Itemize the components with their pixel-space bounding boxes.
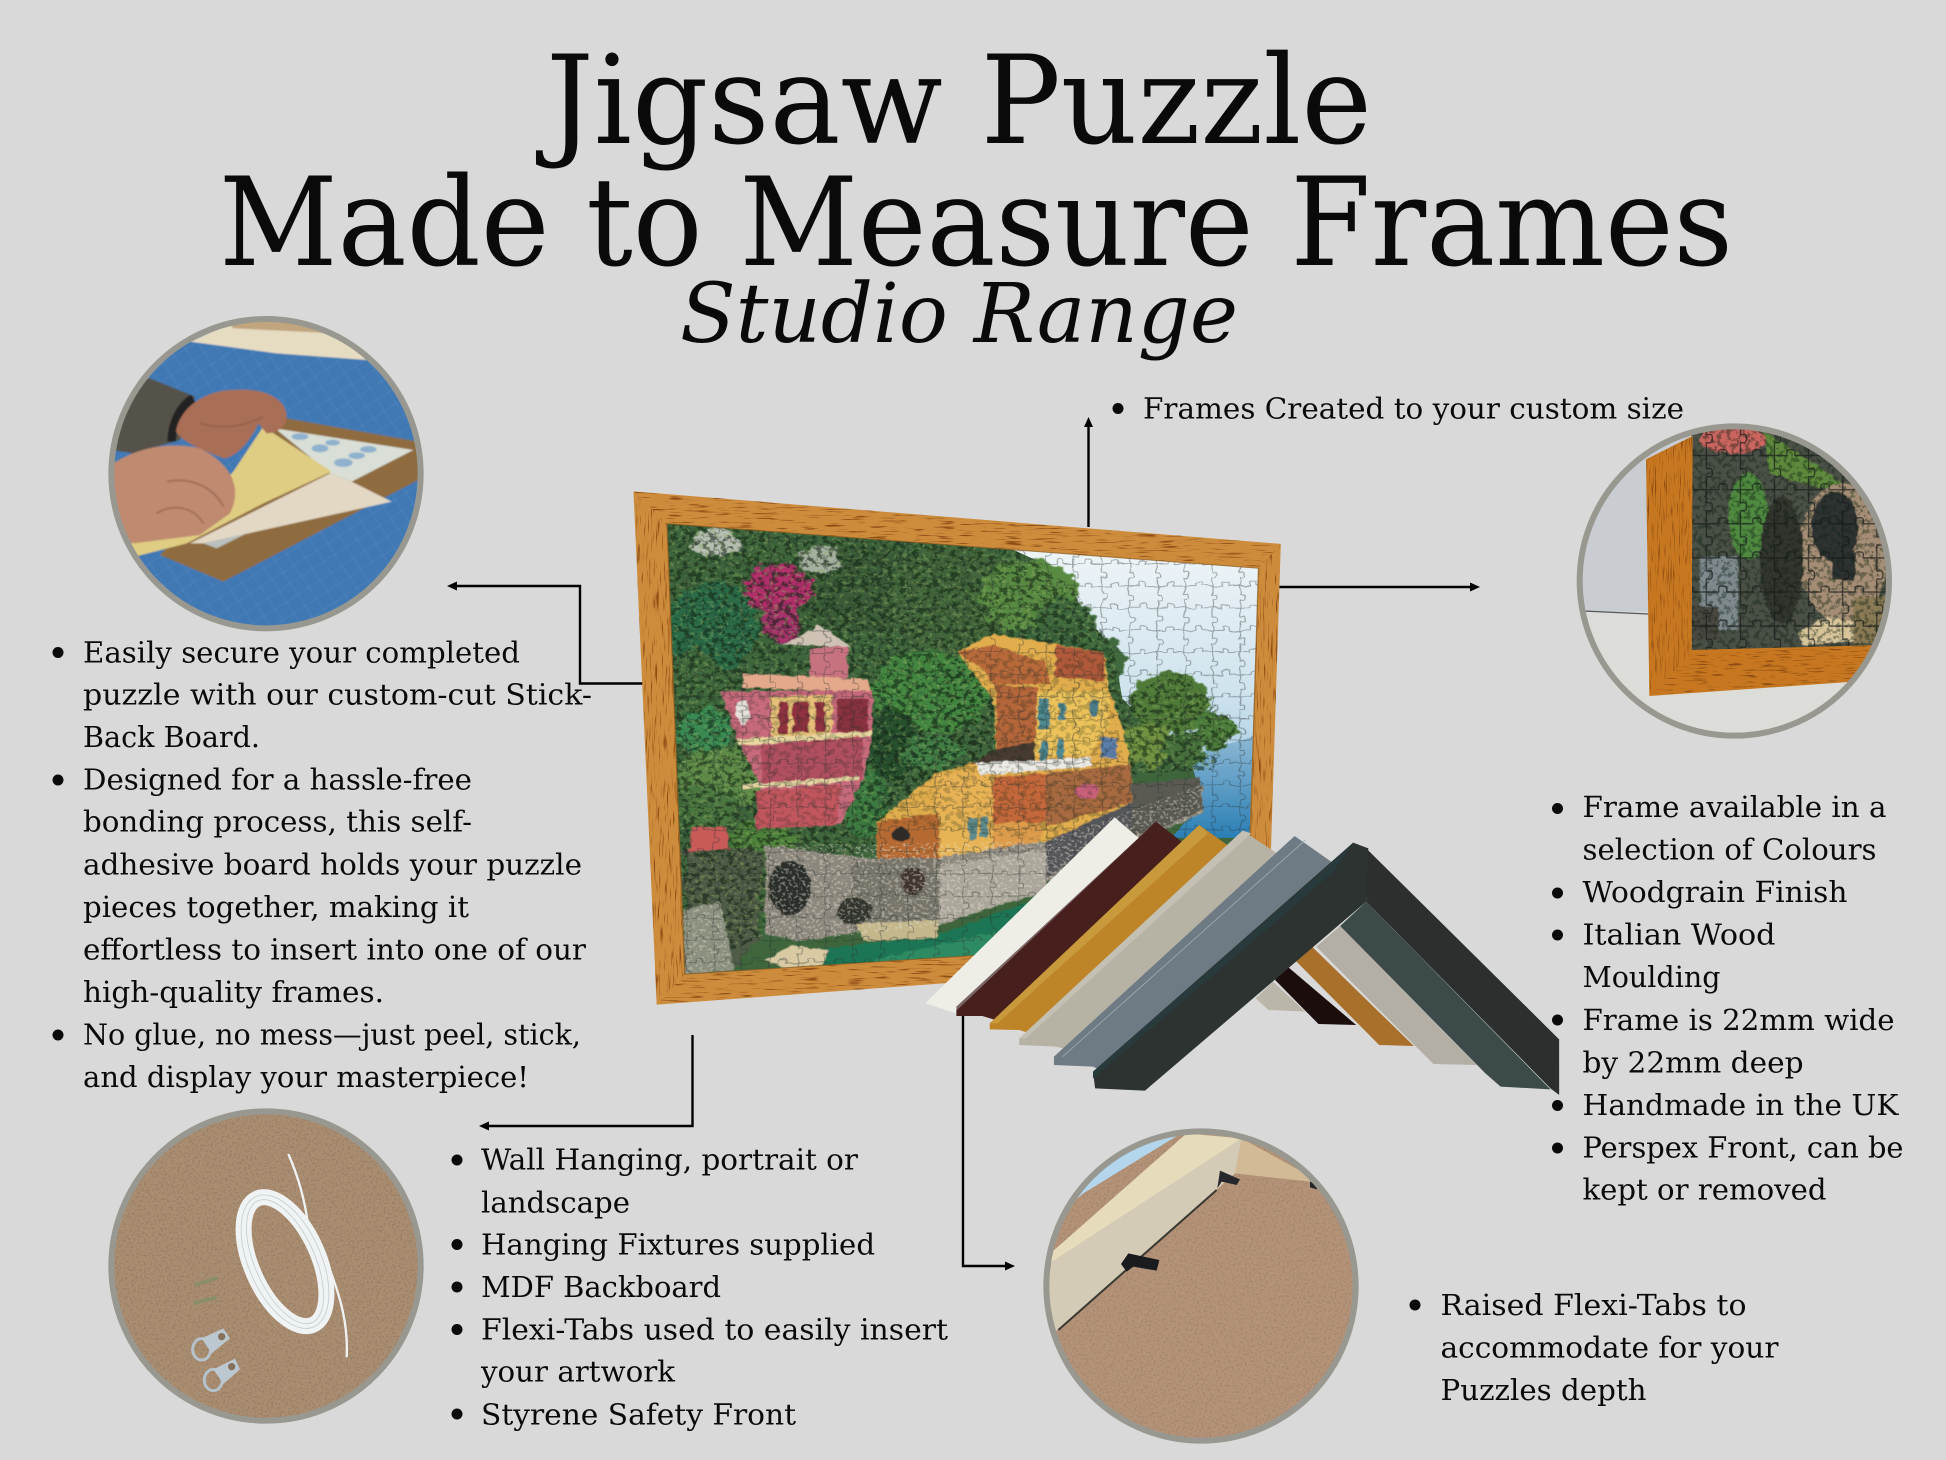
title <box>219 30 1733 295</box>
arrow: down to hanging fixtures <box>479 1035 692 1130</box>
arrow: up to custom size text <box>1084 417 1093 527</box>
subtitle: Studio Range: Studio Range <box>680 267 1238 362</box>
frame samples: six colour corner mouldings <box>925 817 1559 1095</box>
sky and sea <box>1011 549 1265 770</box>
stone moulding <box>1019 831 1279 1050</box>
text block: frame specification: Handmade in the UK <box>1582 1089 1899 1122</box>
text block: frame specification: Italian Wood <box>1582 918 1776 952</box>
yellow villa <box>877 634 1131 859</box>
arrow: left to stick-back board photo <box>447 582 645 684</box>
text block: hanging and backing features: Styrene Safety Front <box>481 1398 797 1431</box>
text block: stick-back board benefits: puzzle with our custom-cut Stick- <box>83 678 592 712</box>
text block: stick-back board benefits: pieces together, making it <box>83 891 470 924</box>
gold moulding <box>990 825 1230 1033</box>
text block: raised flexi-tabs: Puzzles depth <box>1440 1374 1646 1407</box>
text block: stick-back board benefits <box>52 636 592 1094</box>
text block: stick-back board benefits: bonding process, this self- <box>83 806 472 839</box>
text block: hanging and backing features: landscape <box>481 1186 630 1219</box>
foliage <box>665 528 1236 974</box>
photo: framed jigsaw puzzle <box>633 491 1281 1005</box>
arrow: right to corner detail photo <box>1278 582 1480 592</box>
black moulding <box>1093 843 1559 1095</box>
text block: stick-back board benefits: Designed for a hassle-free <box>83 763 472 796</box>
title: Jigsaw Puzzle <box>535 30 1372 173</box>
text block: custom size: Frames Created to your custom size <box>1143 392 1684 425</box>
text block: raised flexi-tabs: Raised Flexi-Tabs to <box>1440 1289 1746 1322</box>
text block: stick-back board benefits: Easily secure your completed <box>83 636 520 669</box>
text block: stick-back board benefits: adhesive board holds your puzzle <box>83 848 582 881</box>
text block: frame specification: Moulding <box>1582 961 1720 994</box>
text block: frame specification: Woodgrain Finish <box>1582 876 1848 909</box>
white moulding <box>925 817 1143 1013</box>
puzzle picture <box>658 516 1270 981</box>
grey moulding <box>1054 836 1334 1072</box>
pink villa <box>721 690 872 827</box>
photo circle: frame corner close-up <box>1577 423 1897 745</box>
text block: frame specification: Frame available in a <box>1582 791 1887 824</box>
wooden frame <box>633 491 1281 1005</box>
text block: stick-back board benefits: high-quality frames. <box>83 976 384 1009</box>
text block: stick-back board benefits: No glue, no mess—just peel, stick, <box>83 1019 581 1052</box>
text block: frame specification: Frame is 22mm wide <box>1582 1004 1894 1037</box>
photo circle: hanging cord, screws and D-rings <box>107 1107 427 1427</box>
text block: frame specification: Perspex Front, can be <box>1582 1132 1904 1164</box>
back legs of mouldings <box>1256 926 1477 1065</box>
text block: raised flexi-tabs: accommodate for your <box>1440 1331 1779 1364</box>
text block: raised flexi-tabs <box>1410 1289 1779 1407</box>
text block: hanging and backing features <box>452 1144 949 1431</box>
text block: frame specification: kept or removed <box>1582 1174 1826 1206</box>
text block: hanging and backing features: MDF Backboard <box>481 1271 721 1304</box>
text block: stick-back board benefits: Back Board. <box>83 721 260 754</box>
title: Made to Measure Frames <box>219 152 1733 295</box>
text block: hanging and backing features: Wall Hanging, portrait or <box>481 1144 858 1176</box>
text block: hanging and backing features: Flexi-Tabs used to easily insert <box>481 1313 949 1346</box>
text block: frame specification <box>1552 791 1904 1206</box>
puzzle piece outlines <box>658 516 1270 981</box>
text block: hanging and backing features: Hanging Fixtures supplied <box>481 1228 875 1262</box>
text block: stick-back board benefits: and display your masterpiece! <box>83 1061 529 1094</box>
rock, water and buildings <box>683 625 1203 977</box>
text block: frame specification: by 22mm deep <box>1582 1046 1804 1079</box>
dark brown moulding <box>956 822 1186 1020</box>
text block: stick-back board benefits: effortless to insert into one of our <box>83 934 586 967</box>
text block: frame specification: selection of Colours <box>1582 833 1876 866</box>
text block: hanging and backing features: your artwork <box>480 1356 676 1389</box>
photo circle: peeling stick-back board <box>103 310 430 637</box>
arrow: down to flexi-tabs photo <box>963 1010 1015 1270</box>
photo circle: raised flexi-tabs on backboard <box>1043 1127 1363 1447</box>
